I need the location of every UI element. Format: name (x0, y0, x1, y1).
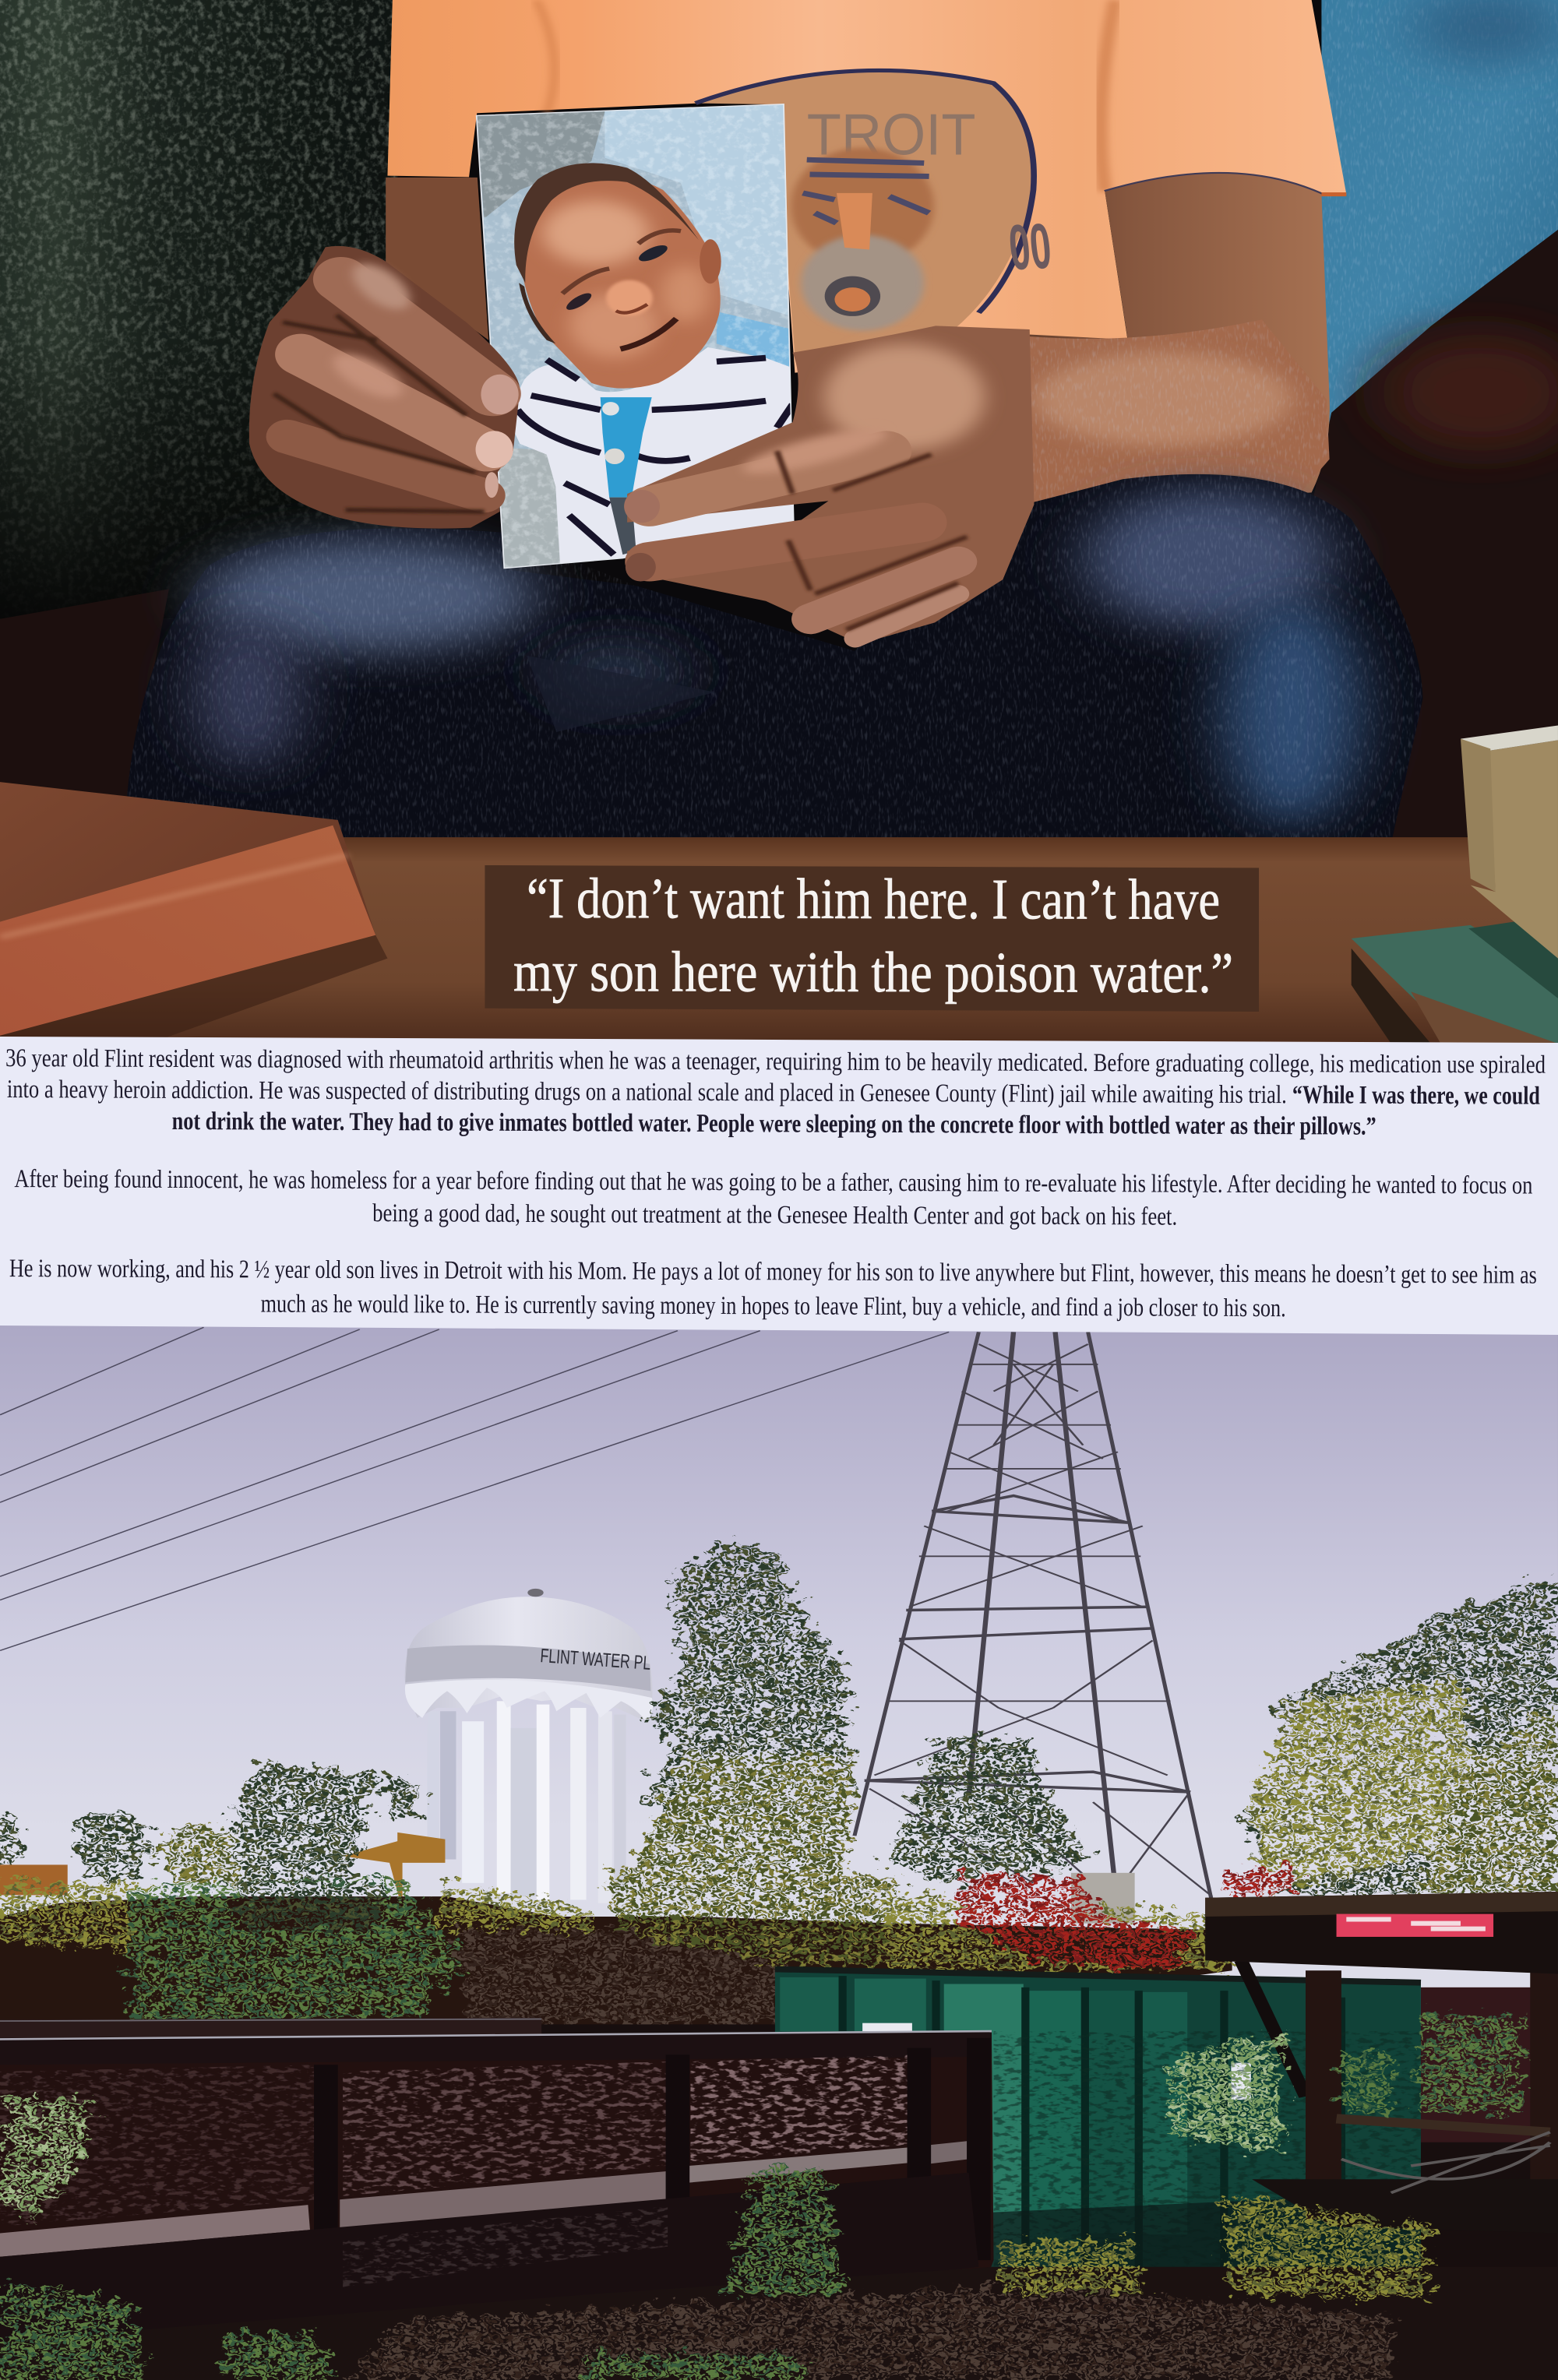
tower legs (427, 1701, 626, 1903)
overcast sky (0, 1324, 1558, 2380)
dark undergrowth (0, 2267, 1558, 2380)
shirt graphic: Detroit tiger: TROIT (807, 102, 976, 167)
foliage in front of machine (1003, 2011, 1521, 2301)
left forearm (386, 178, 488, 340)
shirt graphic: Detroit tiger (696, 70, 1055, 356)
rusty brown dumpster (0, 2018, 994, 2380)
tree at right (1242, 1573, 1558, 1896)
paragraph two (14, 1165, 1532, 1233)
right hand (624, 326, 1034, 644)
power lines (0, 1327, 949, 1650)
dark green knit sweater background (0, 0, 397, 619)
sumac fern left (234, 1762, 422, 1883)
pull quote (513, 867, 1233, 1005)
pull quote: my son here with the poison water.” (513, 940, 1233, 1005)
red sumac bush (953, 1866, 1302, 1970)
dark brush base (0, 1896, 1232, 2034)
story text panel (0, 1037, 1558, 1335)
paragraph one (5, 1044, 1546, 1142)
water tower lettering: FLINT WATER PL (540, 1645, 651, 1674)
distant trees (0, 1809, 252, 1886)
building and orange equipment (0, 1833, 1135, 1924)
baby snapshot (471, 100, 802, 572)
paragraph three: much as he would like to. He is currently saving money in hopes to leave Flint, buy a vehicle, and find a job closer to his son. (261, 1290, 1286, 1322)
green plants in foreground (0, 2099, 844, 2380)
right arm (994, 174, 1330, 512)
brown book left (0, 782, 387, 1044)
left hand (249, 246, 520, 529)
rock and blanket behind baby (471, 100, 802, 572)
white striped onesie (506, 347, 795, 565)
green dumpster (775, 1967, 1421, 2273)
central tree (616, 1540, 855, 1903)
pull quote: “I don’t want him here. I can’t have (527, 867, 1220, 932)
photograph: man seated with books on a table: 00 (1006, 211, 1055, 283)
brown couch (0, 230, 1558, 844)
foliage bushes (0, 1869, 1232, 2024)
photograph: Flint water tower and dumpsters (0, 1324, 1558, 2380)
rusty rear panel at right (1421, 1987, 1558, 2142)
dark backing for lower scene (0, 2024, 1558, 2380)
wooden table (0, 837, 1558, 1044)
blue shirt background (1321, 0, 1558, 426)
denim jeans (124, 474, 1423, 844)
orange t-shirt (387, 0, 1346, 373)
paragraph one: into a heavy heroin addiction. He was suspected of distributing drugs on a national scale and placed in Genesee County (Flint) jail while awaiting his trial. (7, 1076, 1287, 1109)
small tree in front of pylon (884, 1735, 1093, 1896)
red sign on machine (1337, 1914, 1493, 1937)
transmission tower (855, 1332, 1212, 1903)
Flint water tower (405, 1589, 653, 1903)
paragraph two: being a good dad, he sought out treatment at the Genesee Health Center and got back on his feet. (372, 1199, 1177, 1231)
stacked books right (1352, 726, 1558, 1044)
paragraph three (9, 1255, 1537, 1324)
brown quote box (485, 865, 1259, 1012)
photograph: man seated with books on a table (0, 0, 1558, 1044)
black roofed machine at right (1205, 1892, 1558, 2233)
hands holding baby snapshot (249, 100, 1034, 644)
story text (5, 1044, 1546, 1324)
baby head (514, 163, 721, 389)
